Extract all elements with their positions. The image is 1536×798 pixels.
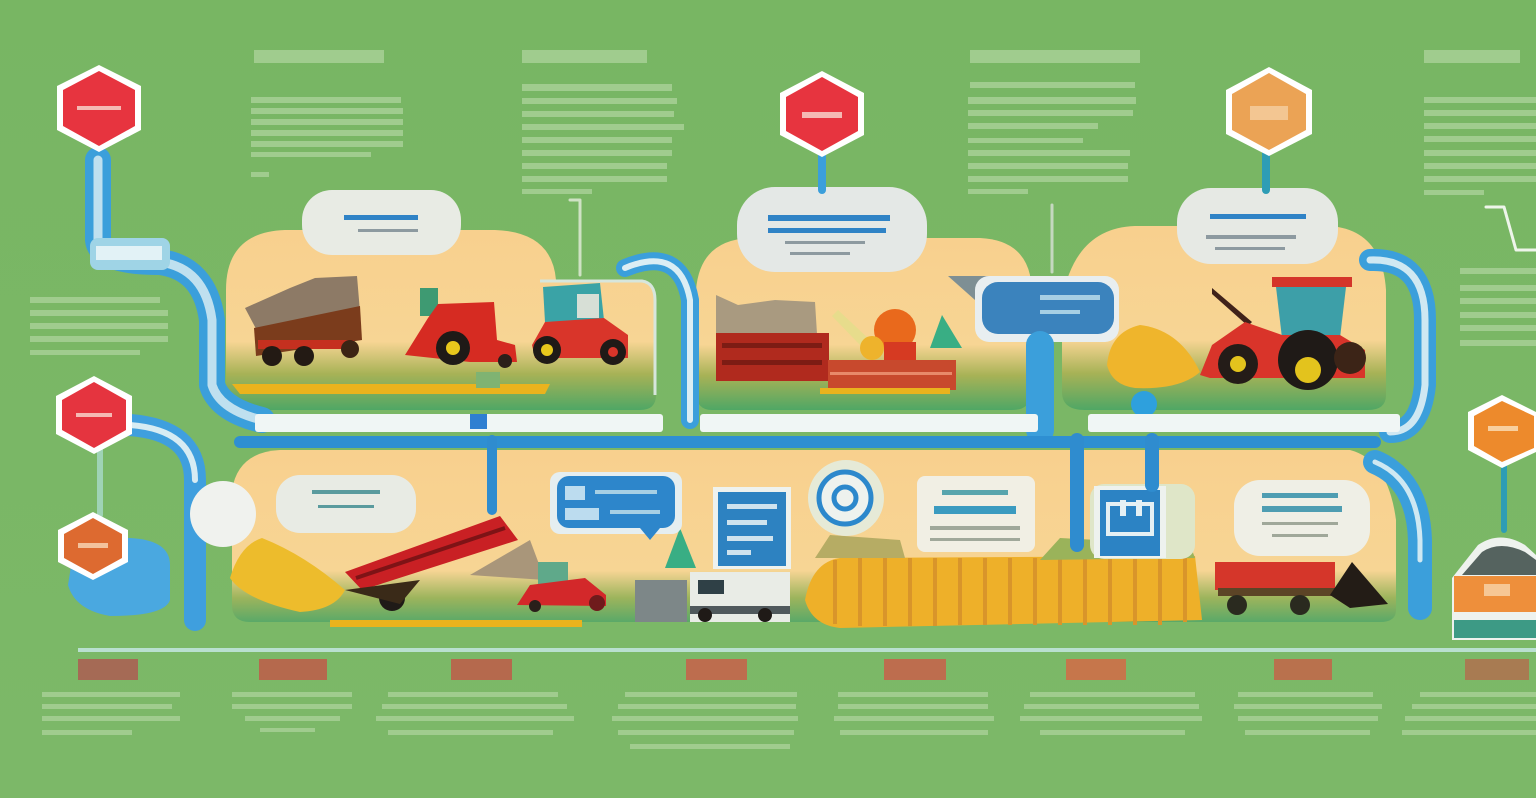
icon: crate stack (716, 295, 956, 390)
icon: small blue label (90, 238, 170, 270)
icon: hay pile (1107, 325, 1200, 388)
icon: wheat field (805, 535, 1202, 628)
text block: top 1 (illegible) (251, 50, 403, 177)
label bubble lower left (276, 475, 416, 533)
text block: right middle (illegible) (1460, 268, 1536, 346)
icon: vegetables (832, 309, 962, 360)
text block: left middle (illegible) (30, 297, 168, 355)
icon: blue location dot (1131, 391, 1157, 417)
icon: grey machine and truck (635, 528, 790, 622)
text block: bottom 8 (illegible) (1402, 692, 1536, 735)
badge: red hexagon left middle (56, 376, 132, 454)
badge: orange hexagon right (1468, 395, 1536, 468)
badge: orange hexagon left lower (58, 512, 128, 580)
icon: loaded trailer (245, 276, 362, 366)
icon: red farm trailer (1215, 562, 1388, 615)
text block: bottom 2 (illegible) (232, 692, 352, 732)
panel: upper right farm scene (1062, 188, 1386, 417)
text block: bottom 3 (illegible) (376, 692, 574, 735)
panel: upper middle farm scene (696, 187, 1030, 410)
label bubble (1177, 188, 1338, 264)
blue water pool left (68, 538, 170, 616)
icon: teal cab tractor (532, 283, 628, 365)
blank round node (190, 481, 256, 547)
icon: big red tractor (1200, 277, 1366, 390)
text block: top 2 (illegible) (522, 50, 684, 194)
label bubble (302, 190, 461, 255)
label bubble (737, 187, 927, 272)
timeline line (78, 648, 1536, 652)
card: orange corner sign (1452, 538, 1536, 640)
text block: top 3 (illegible) (968, 50, 1140, 194)
label bubble lower right (1234, 480, 1370, 556)
callout: blue chat bubble (550, 472, 682, 540)
text block: top 4 (illegible) (1424, 50, 1536, 195)
text block: bottom 7 (illegible) (1234, 692, 1382, 735)
white divider bars (255, 414, 1400, 432)
text block: bottom 5 (illegible) (834, 692, 994, 735)
panel: lower farm scene (230, 450, 1396, 628)
card: blue document (713, 487, 791, 569)
icon: red tractor (405, 288, 517, 368)
badge: red hexagon top left (57, 65, 141, 152)
icon: small red tractor (517, 562, 606, 612)
badge: orange hexagon top right (1226, 67, 1312, 156)
icon: round badge (808, 460, 884, 536)
text block: bottom 1 (illegible) (42, 692, 180, 735)
arrow: blue pipeline network (98, 150, 1536, 620)
frame: right scene outline (540, 281, 655, 395)
badge: red hexagon centre (780, 71, 864, 157)
timeline markers (78, 659, 1529, 680)
icon: red conveyor harvester (345, 516, 545, 611)
text block: bottom 4 (illegible) (612, 692, 798, 749)
card: blue calendar icon (1090, 484, 1195, 559)
callout: blue sign (948, 276, 1119, 342)
panel: upper left farm scene (226, 190, 656, 410)
label card (917, 476, 1035, 552)
text block: bottom 6 (illegible) (1020, 692, 1202, 735)
icon: hay pile left (230, 538, 345, 612)
